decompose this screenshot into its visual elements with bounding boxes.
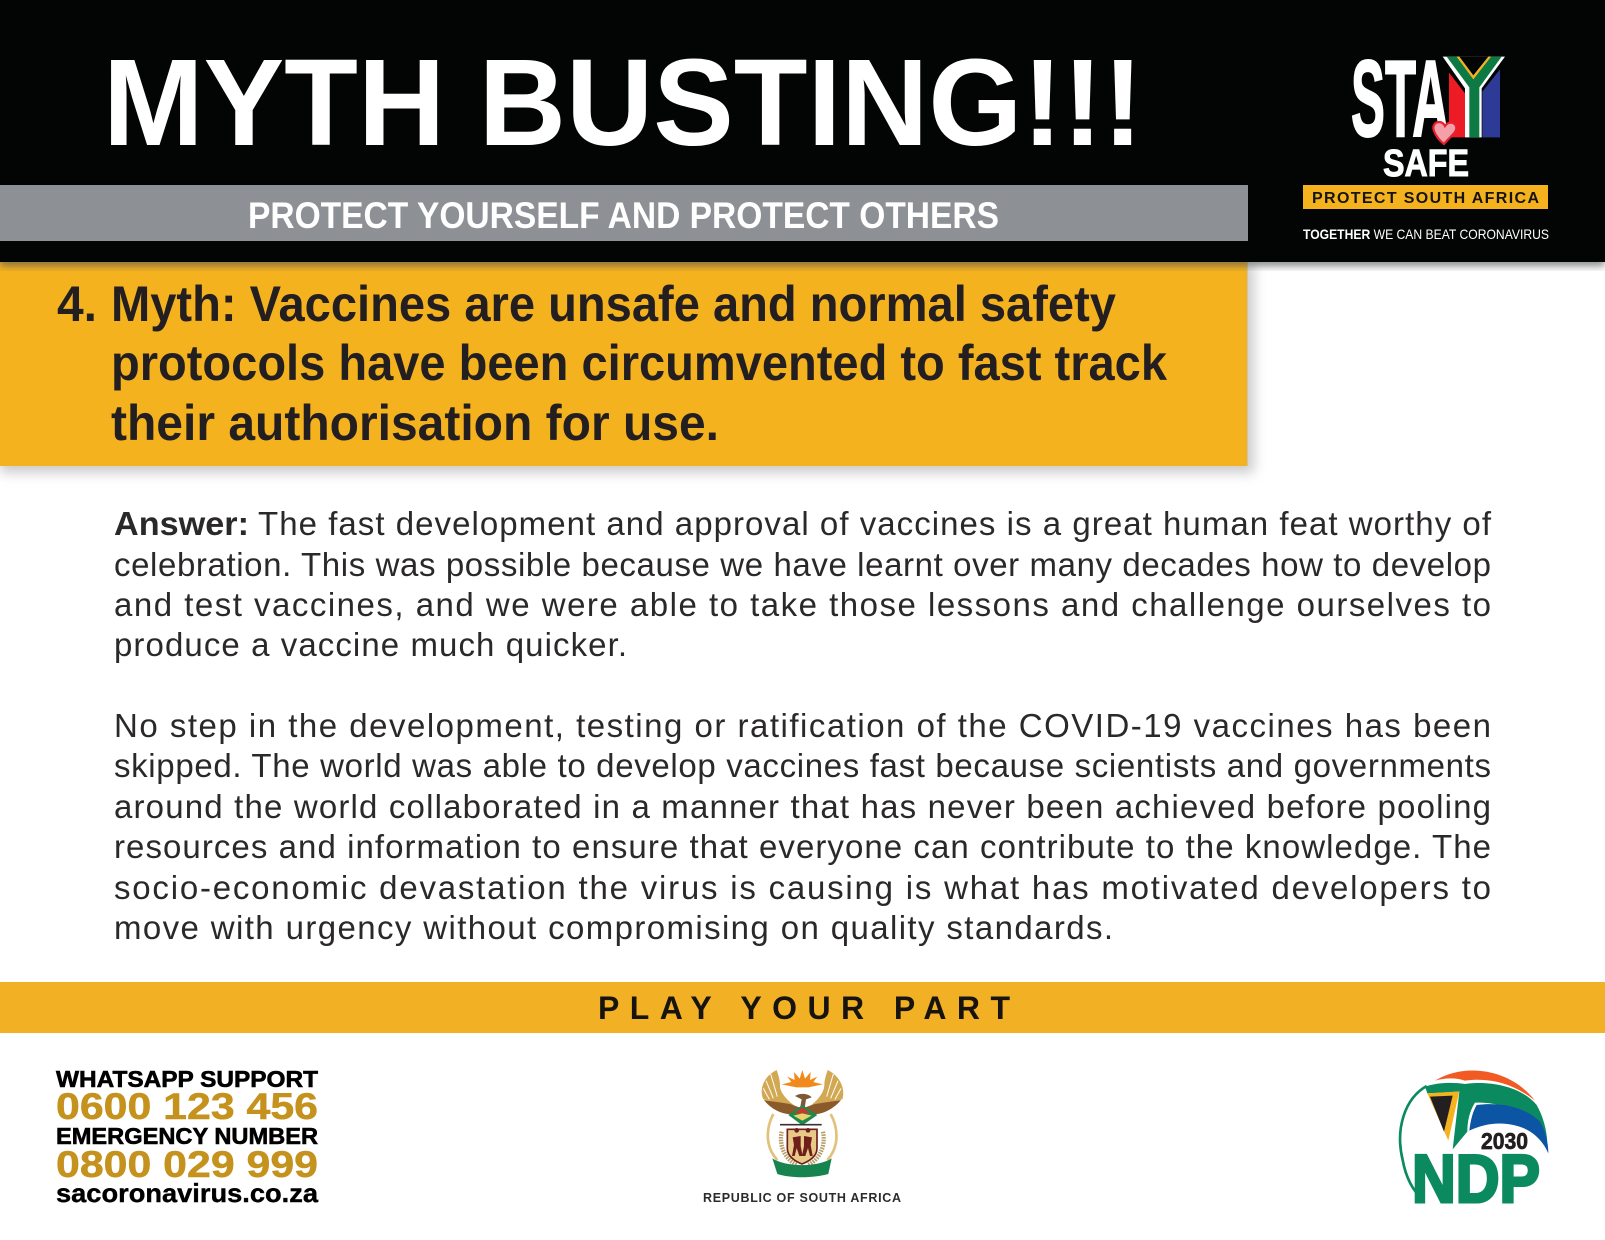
logo: stay safe: STA (1351, 38, 1449, 160)
NDP wordmark: NDP (1412, 1141, 1540, 1217)
myth number: 4. (57, 276, 97, 332)
myth heading line 1: Myth: Vaccines are unsafe and normal safety (111, 276, 1116, 332)
logo word SAFE: SAFE (1383, 143, 1469, 185)
subtitle bar: PROTECT YOURSELF AND PROTECT OTHERS (248, 195, 999, 236)
badge: protect south africa: PROTECT SOUTH AFRICA (1312, 190, 1539, 207)
text block: answer paragraph 2 (114, 707, 1491, 946)
text block: answer paragraph 2: socio-economic devastation the virus is causing is what has motivated developers to (114, 869, 1491, 906)
text block: answer paragraph 2: move with urgency without compromising on quality standards. (114, 909, 1113, 946)
emergency label: EMERGENCY NUMBER (56, 1123, 318, 1149)
panel: header band (0, 0, 1605, 266)
icon: heart (1433, 122, 1456, 144)
text block: answer paragraph 1: Answer: (114, 505, 249, 542)
contact details (56, 1066, 319, 1208)
banner: play your part: PLAY YOUR PART (598, 990, 1010, 1026)
text block: answer paragraph 2: skipped. The world was able to develop vaccines fast because scientists and governments (114, 747, 1491, 784)
text block: answer paragraph 1: The fast development and approval of vaccines is a great human feat worthy of (258, 505, 1492, 542)
text block: answer paragraph 2: resources and information to ensure that everyone can contribute to the knowledge. The (114, 828, 1491, 865)
text block: answer paragraph 1: and test vaccines, and we were able to take those lessons and challenge ourselves to (114, 586, 1491, 623)
whatsapp number: 0600 123 456 (56, 1086, 318, 1127)
caption: REPUBLIC OF SOUTH AFRICA (703, 1191, 901, 1205)
year 2030: 2030 (1481, 1128, 1528, 1154)
subtitle bar (0, 185, 1248, 241)
panel: myth statement (0, 262, 1254, 473)
whatsapp label: WHATSAPP SUPPORT (56, 1066, 318, 1092)
icon: flag Y (1443, 57, 1505, 137)
logo: coat of arms (703, 1070, 901, 1205)
text block: answer paragraph 2: No step in the development, testing or ratification of the COVID-19 vaccines has been (114, 707, 1491, 744)
title: MYTH BUSTING!!! (103, 35, 1143, 172)
text block: answer paragraph 2: around the world collaborated in a manner that has never been achieved before pooling (114, 788, 1491, 825)
badge: protect south africa (1303, 185, 1548, 209)
text block: answer paragraph 1 (114, 505, 1492, 663)
myth heading line 2: protocols have been circumvented to fast track (111, 335, 1167, 391)
website: sacoronavirus.co.za (56, 1178, 319, 1208)
tagline: TOGETHER WE CAN BEAT CORONAVIRUS (1303, 226, 1549, 242)
banner: play your part (0, 982, 1605, 1033)
emergency number: 0800 029 999 (56, 1144, 318, 1185)
icon: NDP flag swoosh (1400, 1071, 1548, 1201)
myth heading line 3: their authorisation for use. (111, 395, 719, 451)
text block: answer paragraph 1: produce a vaccine much quicker. (114, 626, 627, 663)
logo: NDP 2030 (1400, 1071, 1548, 1217)
logo: stay safe (1303, 38, 1549, 242)
icon: emblem (762, 1070, 843, 1177)
text block: answer paragraph 1: celebration. This was possible because we have learnt over many decades how to develop (114, 546, 1491, 583)
